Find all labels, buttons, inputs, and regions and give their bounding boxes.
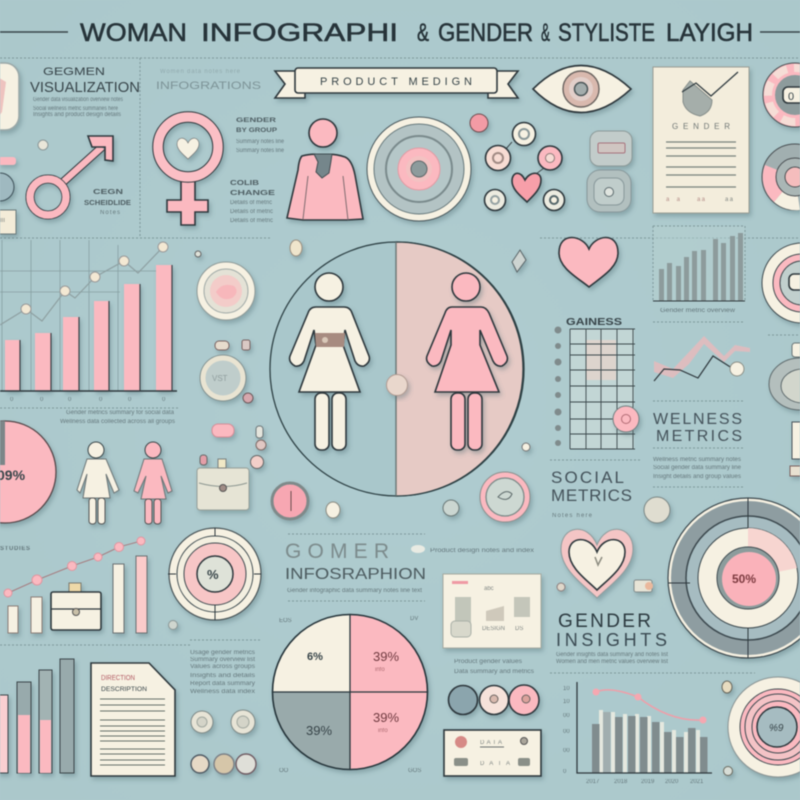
text: gender insights: GENDER (558, 611, 651, 632)
panel: visualization heading: VISUALIZATION (30, 79, 140, 96)
panel: document with check (653, 67, 749, 213)
chart: bottom right bars: 10 (563, 686, 570, 692)
text: female captions: Details of metric (230, 218, 273, 224)
chart: rising pink bars: 0 (128, 397, 132, 403)
text: card caption: Data summary and metrics (454, 669, 534, 675)
text: gender insights: Women and men metric values overview list (556, 659, 668, 665)
chart: bottom right bars: 00 (563, 748, 570, 754)
text: wellness metrics: Insight details and group values (653, 474, 741, 480)
text: pie side labels: EOS (279, 618, 292, 624)
text: female captions: Details of metric (230, 200, 272, 206)
text: wellness metrics: Wellness metric summary notes (653, 457, 741, 463)
text: bottom left notes: Usage gender metrics (190, 650, 255, 656)
chart: bottom right bars: 2018 (614, 779, 628, 785)
heading: gomer infographic: INFOSRAPHION (285, 566, 426, 583)
panel: cream icon card (443, 574, 541, 648)
text: social metrics (551, 468, 632, 519)
text: social metrics: SOCIAL (551, 468, 624, 487)
chart: four quarter pie: info (375, 667, 385, 673)
chart: rising pink bars: 0 (40, 397, 44, 403)
text: bottom left notes: Values across groups (190, 664, 255, 670)
text: wellness metrics: METRICS (656, 428, 742, 445)
figure: small pink (134, 442, 172, 524)
icon: device at left edge (0, 63, 19, 234)
text: female captions (230, 117, 285, 224)
figure: cream woman with belt (290, 273, 369, 450)
panel: legend card: DATA (480, 761, 510, 767)
panel: document description: DESCRIPTION (101, 686, 147, 693)
icon: concentric target (168, 528, 261, 630)
chart: line and bars bottom left: STUDIES (0, 546, 30, 552)
icon: pink heart (559, 238, 618, 287)
text: social metrics: METRICS (551, 486, 632, 505)
figure: small cream (77, 442, 119, 524)
text: note by card (411, 545, 534, 554)
text: chart captions: Wellness data collected across all groups (60, 419, 175, 425)
text: female captions: Summary notes line (236, 148, 285, 154)
text: female captions: Details of metric (230, 209, 273, 215)
chart: four quarter pie: 6% (307, 651, 323, 663)
text: chart captions: Gender metrics summary for social data (66, 410, 175, 416)
text: female captions: BY GROUP (236, 127, 278, 134)
title: WOMAN (80, 19, 187, 47)
panel: document with check: GENDER (672, 122, 730, 131)
icon: outlined heart (557, 529, 653, 598)
icon: big target (668, 498, 800, 658)
heading: gomer infographic: Gender infographic data summary notes line text (287, 588, 422, 594)
icon: cream briefcase (197, 455, 264, 510)
title: LAYIGH (666, 19, 753, 47)
text: pie side labels: OO (279, 768, 289, 774)
icon: female symbol (158, 117, 218, 225)
icon: ring with small items: VST (212, 374, 228, 383)
icon: small circle group (191, 710, 256, 774)
text: gender insights: INSIGHTS (556, 630, 667, 650)
panel: document description: DIRECTION (101, 675, 135, 682)
chart: bottom right bars: 0 (563, 769, 567, 775)
text: female captions: GENDER (236, 117, 276, 124)
chart: four quarter pie: info (378, 728, 388, 734)
chart: stacked bars bottom left (0, 659, 74, 773)
text: pie side labels: DV (410, 616, 418, 622)
text: bottom left notes: Summary overview list (190, 657, 255, 663)
chart: pink and dark line (654, 336, 750, 381)
chart: four quarter pie: 39% (373, 710, 399, 725)
panel: cream icon card: DESIGN (482, 626, 505, 632)
chart: line and bars bottom left (0, 537, 147, 633)
chart: bottom right bars: 2017 (586, 779, 600, 785)
icon: right gray badge (769, 343, 800, 476)
chart: bottom right bars: 2019 (641, 779, 655, 785)
text: wellness metrics: Social gender data summary line (653, 465, 742, 471)
panel: visualization heading (30, 66, 140, 118)
panel: document with check: aa (666, 197, 681, 203)
panel: visualization heading: Social wellness metric summaries here (33, 106, 119, 112)
text: chart captions (60, 410, 175, 425)
icon: segmented rings top right (762, 63, 800, 210)
icon: small marker (38, 140, 48, 150)
chart: bottom right bars: 10 (563, 699, 570, 705)
chart: gray bars (653, 226, 745, 314)
panel: legend card: DATA (480, 740, 502, 746)
title: & (417, 19, 429, 47)
chart: four quarter pie (272, 614, 428, 770)
heading: gomer infographic (285, 540, 426, 594)
title (0, 19, 800, 47)
text: male caption (84, 189, 131, 216)
icon: eye (533, 66, 631, 112)
text: social metrics: Notes here (552, 513, 593, 519)
chart: grid table (554, 316, 639, 449)
icon: center scatter small (195, 240, 530, 451)
text: wellness metrics (653, 411, 742, 480)
icon: network nodes (470, 114, 564, 210)
icon: male symbol (30, 136, 113, 215)
icon: segmented rings top right: 0 (788, 91, 794, 103)
title: & (541, 19, 550, 47)
panel: legend card (444, 730, 541, 776)
title: STYLISTE (558, 19, 655, 47)
text: female captions: COLIB (230, 180, 259, 187)
panel: cream icon card: abc (484, 586, 494, 592)
chart: bottom right bars (563, 682, 712, 785)
icon: right ring mid (762, 243, 800, 323)
text: gender insights: Gender insights data summary and notes list (556, 652, 668, 658)
panel: document with check: aa (725, 197, 734, 203)
icon: bottom right ring (722, 677, 800, 777)
banner: product design: PRODUCT MEDIGN (320, 76, 472, 88)
icon: round clock icon (197, 262, 255, 320)
panel: document description (91, 663, 175, 776)
chart: pink pie at left (0, 421, 56, 523)
icon: gray badges (587, 131, 632, 212)
text: pie side labels (279, 616, 421, 774)
panel: visualization heading: GEGMEN (43, 66, 105, 78)
text: card caption: Product gender values (454, 659, 522, 665)
text: bottom left notes: Wellness data index (190, 689, 255, 695)
icon: small dial (644, 497, 670, 523)
chart: grid table: GAINESS (566, 316, 622, 328)
text: faded infographics header (156, 69, 261, 92)
text: male caption: SCHEIDLIDE (84, 200, 131, 207)
text: wellness metrics: WELNESS (653, 411, 742, 428)
chart: bottom right bars: 00 (563, 713, 570, 719)
icon: device at left edge: III (0, 218, 5, 224)
text: gender insights (556, 611, 668, 665)
chart: bottom right bars: 00 (563, 729, 570, 735)
chart: gray bars: Gender metric overview (660, 308, 736, 314)
panel: visualization heading: Gender data visualization overview notes (33, 97, 123, 103)
text: note by card: Product design notes and index (430, 548, 534, 554)
text: male caption: Notes (100, 210, 120, 216)
title: GENDER (438, 19, 533, 47)
icon: center medallion (386, 374, 408, 396)
icon: target (367, 117, 471, 221)
icon: person with scarf (287, 119, 363, 220)
icon: concentric target: % (207, 567, 219, 582)
panel: visualization heading: Insights and product design details (33, 112, 121, 118)
chart: rising pink bars: 0 (99, 397, 103, 403)
text: faded infographics header: INFOGRATIONS (156, 80, 261, 92)
icon: dial buttons below circle (272, 472, 530, 522)
figure: pink woman (427, 273, 507, 450)
icon: ring with small items (200, 340, 263, 438)
text: female captions: CHANGE (230, 190, 275, 197)
text: bottom left notes (190, 650, 255, 695)
panel: document with check: aa (697, 197, 706, 203)
text: pie side labels: GOS (408, 768, 421, 774)
text: female captions: Summary notes line (236, 139, 285, 145)
text: bottom left notes: Insights and details (190, 673, 255, 679)
chart: bottom right bars: 2020 (665, 779, 679, 785)
text: card caption (454, 659, 534, 675)
chart: four quarter pie: 39% (373, 649, 399, 664)
small figures (77, 442, 172, 524)
panel: cream icon card: DS (515, 626, 523, 632)
panel: main gender circle (270, 242, 524, 496)
text: faded infographics header: Women data notes here (160, 69, 241, 75)
chart: rising pink bars (0, 240, 177, 403)
icon: bottom right ring: %9 (769, 723, 784, 734)
text: bottom left notes: Report data summary (190, 681, 255, 687)
chart: rising pink bars: 0 (162, 397, 166, 403)
text: male caption: CEGN (93, 189, 123, 196)
heading: gomer infographic: GOMER (285, 540, 389, 563)
title: INFOGRAPHI (201, 19, 398, 47)
icon: three circles (448, 685, 539, 715)
icon: cream briefcase bottom (51, 583, 101, 630)
chart: rising pink bars: 0 (68, 397, 72, 403)
chart: bottom right bars: 2021 (690, 779, 704, 785)
banner: product design (275, 68, 518, 98)
chart: rising pink bars: 0 (10, 397, 14, 403)
chart: four quarter pie: 39% (306, 723, 332, 738)
icon: big target: 50% (732, 572, 756, 586)
